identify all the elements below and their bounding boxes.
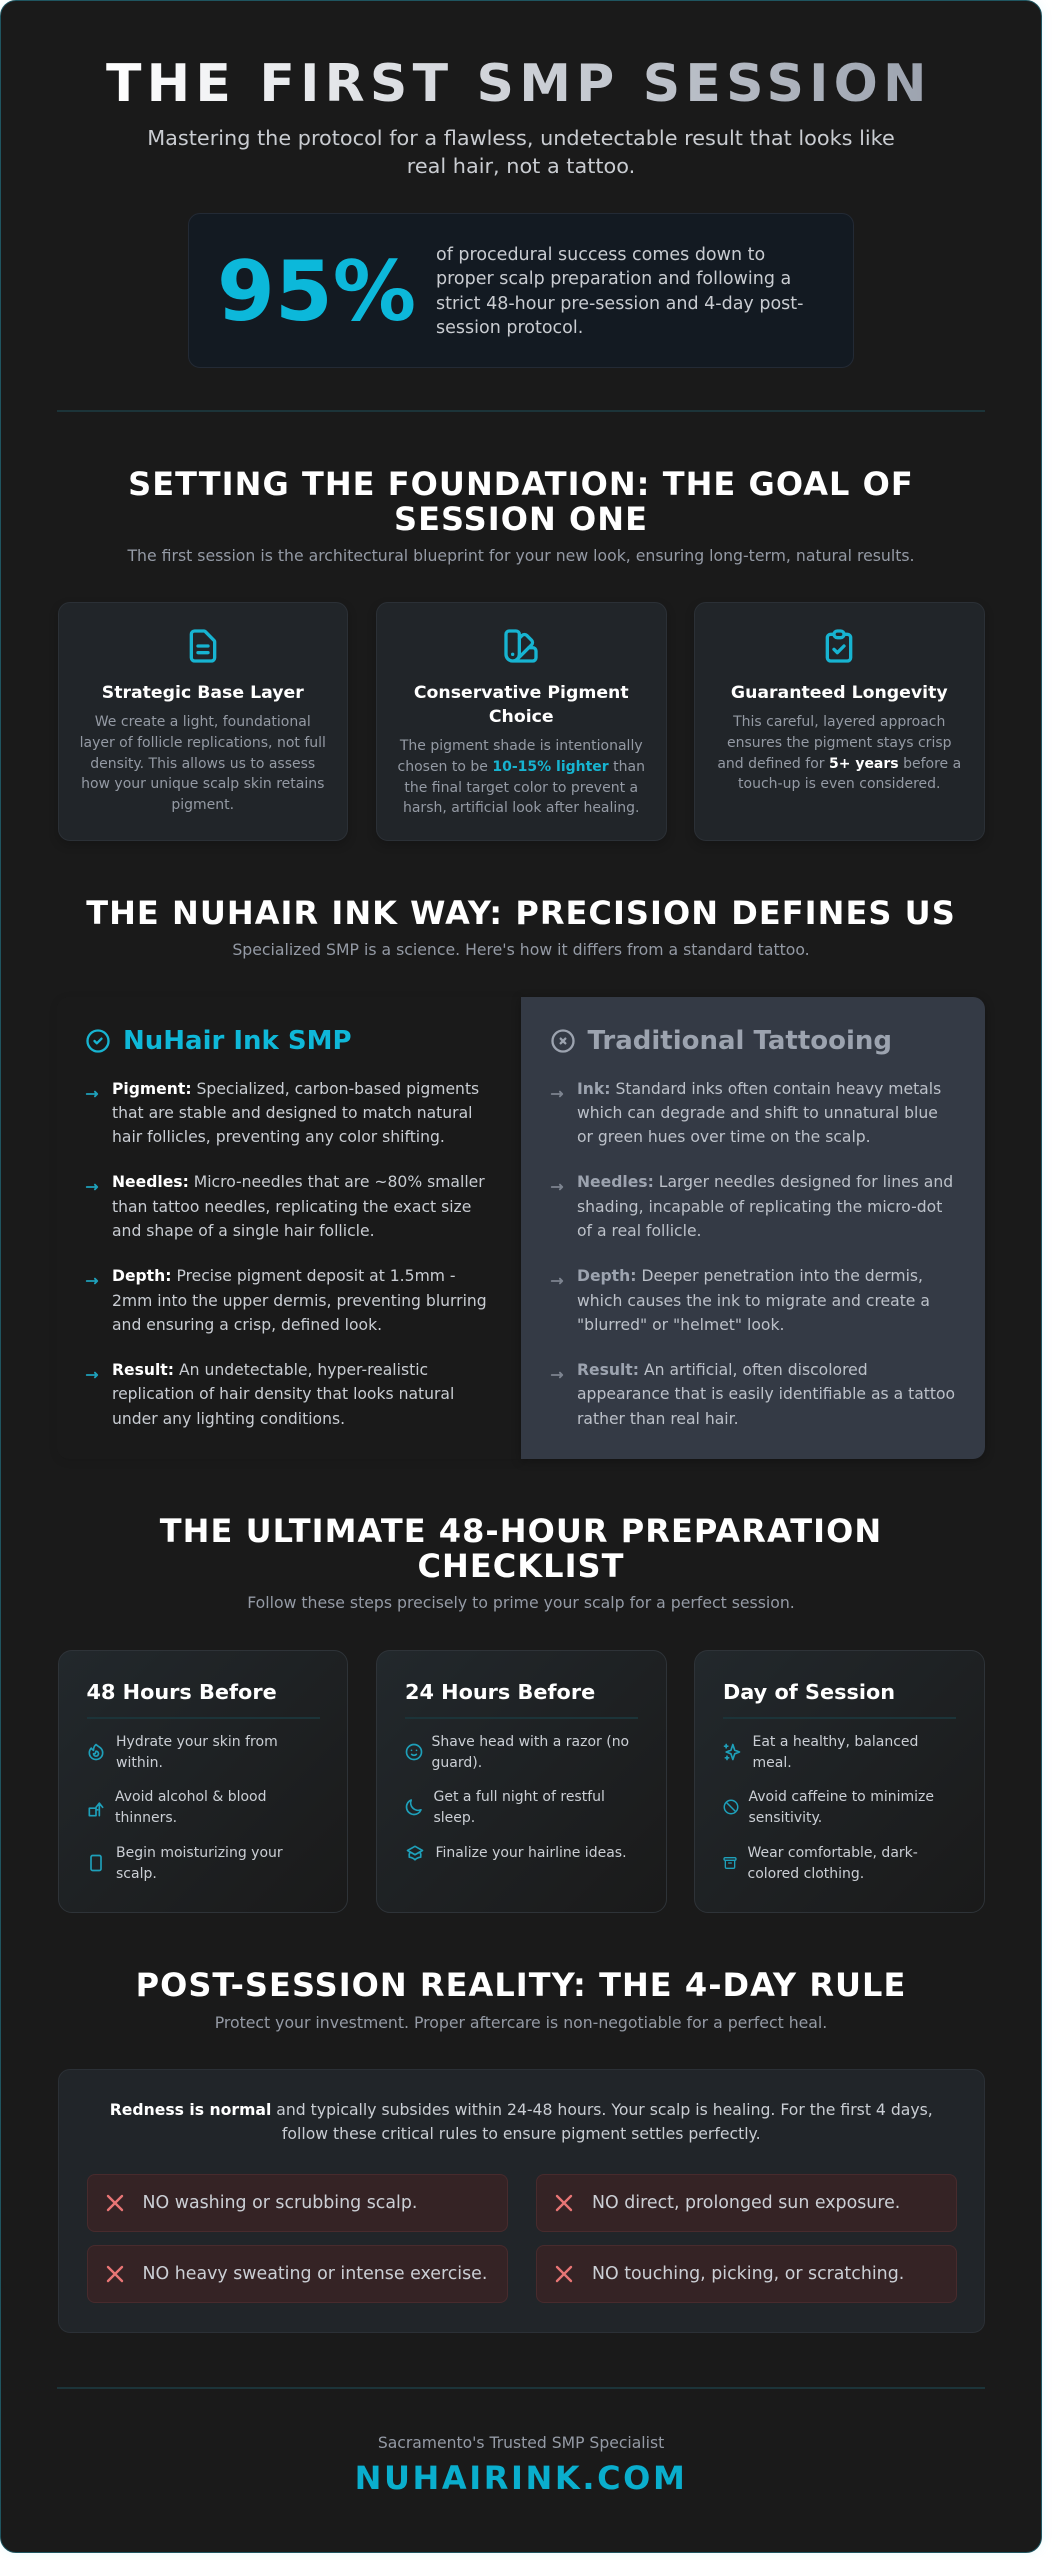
rule: no sun: NO direct, prolonged sun exposure.	[592, 2193, 900, 2213]
heading: foundation	[128, 465, 914, 538]
icon: fire	[88, 1744, 104, 1760]
item: result	[112, 1361, 454, 1428]
post-session subheading: Protect your investment. Proper aftercare is non-negotiable for a perfect heal.	[215, 2013, 827, 2032]
item: eat: Eat a healthy, balanced	[752, 1734, 918, 1750]
item: sleep	[406, 1789, 605, 1826]
checklist subheading: Follow these steps precisely to prime your scalp for a perfect session.	[247, 1593, 795, 1612]
nuhair way subheading: Specialized SMP is a science. Here's how it differs from a standard tattoo.	[232, 940, 810, 959]
item: result: Result: An undetectable, hyper-realistic	[112, 1361, 428, 1379]
stat description	[436, 245, 803, 338]
aftercare intro	[58, 2098, 984, 2147]
card text: harsh, artificial look after healing.	[403, 800, 640, 816]
arrow	[86, 1090, 98, 1098]
card heading: Day of Session	[723, 1680, 895, 1704]
panel heading: NuHair Ink SMP	[123, 1026, 352, 1056]
item: needles: Needles: Micro-needles that are ~80% smaller	[112, 1173, 485, 1191]
icon: cap	[404, 1843, 424, 1863]
item: shave: Shave head with a razor (no	[432, 1734, 629, 1750]
item: alcohol: thinners.	[115, 1810, 177, 1826]
item: pigment: hair follicles, preventing any color shifting.	[112, 1128, 445, 1146]
card heading: Strategic Base Layer	[102, 683, 304, 703]
card text: density. This allows us to assess	[90, 756, 315, 772]
stat callout: 95%	[188, 213, 854, 368]
item: pigment: Pigment: Specialized, carbon-based pigments	[112, 1080, 479, 1098]
item: needles	[577, 1173, 953, 1240]
item: moisturize	[90, 1845, 283, 1882]
item: clothing	[723, 1843, 963, 1885]
item: depth: and ensuring a crisp, defined look.	[112, 1316, 382, 1334]
rule: no touching	[536, 2245, 957, 2303]
rule: no sun	[536, 2174, 957, 2232]
item: hairline: Finalize your hairline ideas.	[436, 1845, 627, 1861]
item: sleep: sleep.	[434, 1810, 475, 1826]
item: moisturize: scalp.	[116, 1866, 157, 1882]
item: clothing: colored clothing.	[748, 1866, 864, 1882]
card heading: 24 Hours Before	[405, 1680, 595, 1704]
card text: The pigment shade is intentionally	[400, 738, 643, 754]
title: THE FIRST SMP SESSION	[106, 54, 932, 114]
item: depth: Depth: Deeper penetration into the dermis,	[577, 1267, 923, 1285]
checklist card: 24 hours before	[376, 1650, 666, 1913]
item: pigment: that are stable and designed to match natural	[112, 1104, 472, 1122]
aftercare intro: Redness is normal and typically subsides within 24-48 hours. Your scalp is healing. For the first 4 days,	[110, 2100, 933, 2119]
stat description: proper scalp preparation and following a	[436, 269, 791, 289]
heading: checklist	[160, 1512, 882, 1585]
arrow	[550, 1372, 564, 1378]
item: alcohol	[88, 1789, 267, 1826]
rule: no sweating: NO heavy sweating or intense exercise.	[142, 2264, 487, 2284]
heading: foundation: SESSION ONE	[394, 500, 648, 538]
item: shave: guard).	[432, 1755, 482, 1771]
heading: checklist: THE ULTIMATE 48-HOUR PREPARATION	[160, 1512, 882, 1550]
item: depth: which causes the ink to migrate and create a	[577, 1292, 930, 1310]
icon: ban	[722, 1798, 740, 1816]
card text: chosen to be 10-15% lighter than	[398, 759, 645, 775]
heading: post-session: POST-SESSION REALITY: THE 4-DAY RULE	[136, 1966, 906, 2004]
heading: nuhair way: THE NUHAIR INK WAY: PRECISION DEFINES US	[86, 894, 956, 932]
icon: x	[106, 2265, 124, 2283]
item: ink	[577, 1080, 941, 1146]
aftercare intro: follow these critical rules to ensure pigment settles perfectly.	[282, 2124, 761, 2143]
card text: the final target color to prevent a	[404, 780, 638, 796]
item: caffeine	[723, 1787, 963, 1829]
item: depth: 2mm into the upper dermis, preventing blurring	[112, 1292, 487, 1310]
card heading: 48 Hours Before	[86, 1680, 277, 1704]
item: hydrate: within.	[116, 1755, 163, 1771]
rule: no washing	[86, 2174, 508, 2232]
foundation subheading: The first session is the architectural blueprint for your new look, ensuring long-term, natural results.	[127, 546, 915, 565]
item: result: Result: An artificial, often discolored	[577, 1361, 868, 1379]
item: result: appearance that is easily identifiable as a tattoo	[577, 1385, 955, 1403]
card text: ensures the pigment stays crisp	[727, 735, 952, 751]
card text: and defined for 5+ years before a	[717, 756, 961, 772]
item: hairline	[405, 1843, 645, 1885]
item: needles	[112, 1173, 485, 1240]
footer url: NUHAIRINK.COM	[355, 2459, 687, 2497]
item: eat	[723, 1732, 963, 1774]
icon: arrow box	[88, 1802, 104, 1816]
item: ink: Ink: Standard inks often contain heavy metals	[577, 1080, 941, 1098]
card text	[717, 714, 961, 792]
card text	[80, 714, 326, 813]
card: conservative pigment	[376, 602, 666, 841]
icon: color swatch	[504, 629, 538, 663]
icon: x circle	[551, 1029, 575, 1053]
icon: x	[106, 2194, 124, 2212]
item: ink: or green hues over time on the scalp.	[577, 1128, 871, 1146]
item: ink: which can degrade and shift to unnatural blue	[577, 1104, 938, 1122]
rule: no sweating	[86, 2245, 508, 2303]
card heading: Guaranteed Longevity	[731, 683, 948, 703]
icon: archive	[722, 1855, 738, 1871]
card text: This careful, layered approach	[733, 714, 945, 730]
arrow	[86, 1278, 98, 1284]
heading: checklist: CHECKLIST	[417, 1547, 625, 1585]
comparison list	[550, 1080, 955, 1428]
icon: check circle	[86, 1029, 110, 1053]
checklist card: day of session	[694, 1650, 984, 1913]
card text: We create a light, foundational	[95, 714, 311, 730]
item: moisturize: Begin moisturizing your	[116, 1845, 283, 1861]
subtitle	[147, 126, 895, 178]
card text	[398, 738, 645, 816]
checklist card: 48 hours before	[58, 1650, 348, 1913]
card heading: Choice	[489, 707, 554, 727]
panel: traditional tattooing	[521, 997, 985, 1459]
rule: no touching: NO touching, picking, or scratching.	[592, 2264, 904, 2284]
card heading	[414, 683, 629, 727]
comparison list	[86, 1080, 487, 1428]
item: eat: meal.	[752, 1755, 792, 1771]
card text: how your unique scalp skin retains	[81, 776, 324, 792]
icon: document	[190, 629, 216, 663]
card heading: Conservative Pigment	[414, 683, 629, 703]
item: needles: than tattoo needles, replicating the exact size	[112, 1198, 471, 1216]
card: strategic base layer	[58, 602, 348, 841]
rule: no washing: NO washing or scrubbing scalp.	[142, 2193, 417, 2213]
heading: foundation: SETTING THE FOUNDATION: THE GOAL OF	[128, 465, 914, 503]
arrow	[550, 1278, 564, 1284]
subtitle: Mastering the protocol for a flawless, undetectable result that looks like	[147, 126, 895, 150]
card text: layer of follicle replications, not full	[80, 735, 326, 751]
item: pigment	[112, 1080, 479, 1146]
item: depth: Depth: Precise pigment deposit at 1.5mm -	[112, 1267, 456, 1285]
item: hydrate	[88, 1734, 278, 1771]
item: shave	[406, 1734, 629, 1771]
item: result: rather than real hair.	[577, 1410, 739, 1428]
icon: smile	[406, 1744, 422, 1760]
icon: sparkles	[722, 1742, 742, 1762]
arrow	[550, 1184, 564, 1190]
item: needles: shading, incapable of replicating the micro-dot	[577, 1198, 942, 1216]
arrow	[550, 1090, 564, 1098]
item: clothing: Wear comfortable, dark-	[748, 1845, 918, 1861]
arrow	[86, 1184, 98, 1190]
stat description: of procedural success comes down to	[436, 245, 765, 265]
icon: device	[90, 1854, 102, 1872]
icon: moon	[404, 1797, 424, 1817]
item: needles: of a real follicle.	[577, 1222, 702, 1240]
item: hydrate: Hydrate your skin from	[116, 1734, 278, 1750]
icon: x	[555, 2265, 573, 2283]
stat description: strict 48-hour pre-session and 4-day post-	[436, 294, 803, 314]
panel: aftercare rules	[58, 2069, 985, 2332]
item: result: under any lighting conditions.	[112, 1410, 345, 1428]
item: needles: and shape of a single hair follicle.	[112, 1222, 375, 1240]
arrow	[86, 1372, 98, 1378]
panel heading: Traditional Tattooing	[588, 1026, 892, 1056]
panel: nuhair ink smp	[57, 997, 521, 1459]
item: sleep: Get a full night of restful	[434, 1789, 605, 1805]
card text: pigment.	[171, 797, 234, 813]
stat number: 95%	[217, 242, 416, 340]
icon: clipboard check	[826, 629, 852, 663]
item: alcohol: Avoid alcohol & blood	[115, 1789, 267, 1805]
item: result	[577, 1361, 955, 1428]
item: caffeine: sensitivity.	[748, 1810, 822, 1826]
card text: touch-up is even considered.	[738, 776, 940, 792]
footer tagline: Sacramento's Trusted SMP Specialist	[378, 2434, 664, 2452]
item: caffeine: Avoid caffeine to minimize	[748, 1789, 934, 1805]
card: guaranteed longevity	[694, 602, 984, 841]
stat description: session protocol.	[436, 318, 583, 338]
item: result: replication of hair density that looks natural	[112, 1385, 454, 1403]
item: needles: Needles: Larger needles designed for lines and	[577, 1173, 953, 1191]
subtitle: real hair, not a tattoo.	[407, 154, 635, 178]
item: depth	[112, 1267, 487, 1334]
item: depth: "blurred" or "helmet" look.	[577, 1316, 784, 1334]
icon: x	[555, 2194, 573, 2212]
item: depth	[577, 1267, 930, 1334]
